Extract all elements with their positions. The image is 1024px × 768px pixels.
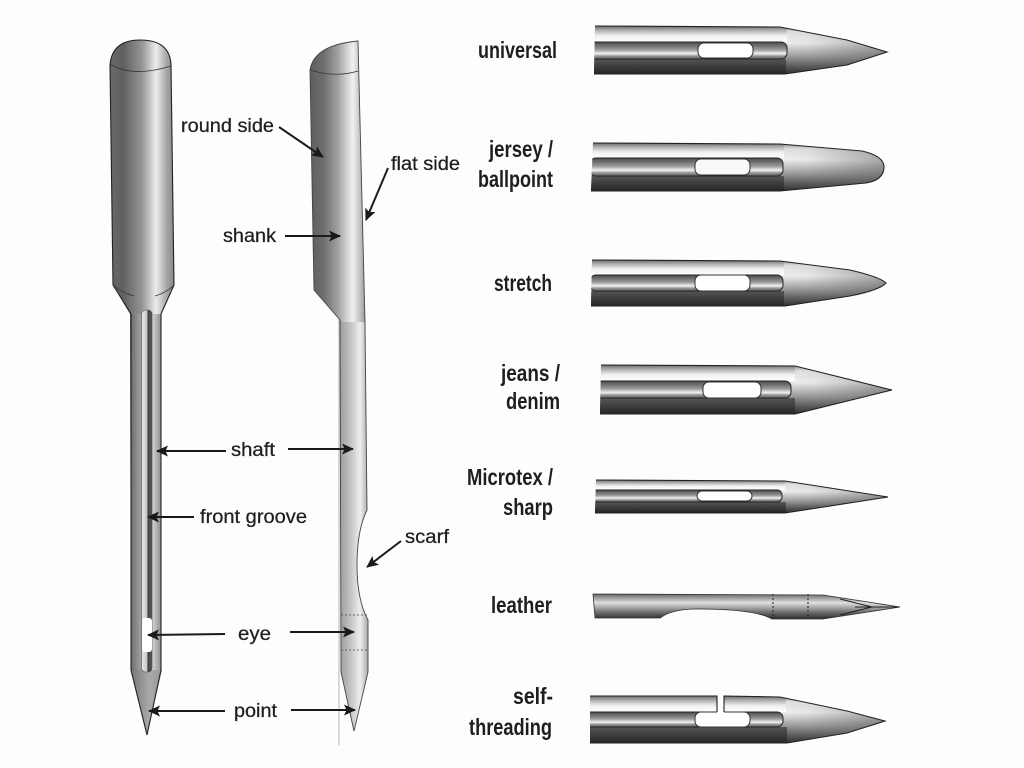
needle type: jersey / ballpoint bbox=[478, 136, 890, 192]
needle: stretch bbox=[590, 260, 890, 306]
arrow: shank bbox=[285, 235, 340, 237]
label: leather: leather bbox=[491, 592, 552, 618]
shoulder lines bbox=[113, 285, 174, 296]
label: point: point bbox=[234, 701, 278, 722]
label: universal: universal bbox=[478, 37, 557, 63]
label: jersey / ballpoint bbox=[478, 136, 553, 192]
eye dashes bbox=[341, 615, 367, 650]
front groove bbox=[142, 310, 152, 672]
arrow: eye left bbox=[148, 634, 225, 635]
label: flat side: flat side bbox=[391, 154, 460, 175]
label: eye: eye bbox=[238, 624, 271, 645]
label: Microtex / sharp bbox=[467, 464, 553, 520]
arrow: round side bbox=[279, 127, 323, 157]
needle: Microtex / sharp bbox=[590, 480, 890, 513]
anatomy labels bbox=[148, 116, 460, 722]
needle: universal bbox=[590, 26, 890, 74]
centre line bbox=[338, 300, 340, 745]
label: jeans / denim: denim bbox=[506, 388, 560, 414]
arrow: front groove bbox=[148, 516, 194, 518]
front needle outline bbox=[110, 40, 174, 735]
shank cap line bbox=[110, 64, 171, 72]
needle type: universal bbox=[478, 26, 890, 74]
needle type: Microtex / sharp bbox=[467, 464, 890, 520]
label: jeans / denim: jeans / bbox=[500, 360, 560, 386]
needle type: stretch bbox=[494, 260, 890, 306]
needle type: jeans / denim bbox=[500, 360, 895, 414]
arrow: eye right bbox=[290, 631, 354, 633]
side needle shaft bbox=[340, 318, 368, 731]
side needle shank bbox=[310, 41, 365, 322]
shank cap line bbox=[310, 70, 358, 74]
label: self-threading bbox=[469, 683, 553, 740]
arrow: point right bbox=[291, 709, 355, 711]
front needle shaft bbox=[130, 310, 161, 670]
label: self-threading: threading bbox=[469, 714, 552, 740]
label: shank: shank bbox=[223, 226, 277, 247]
label: Microtex / sharp: Microtex / bbox=[467, 464, 553, 490]
side needle outline bbox=[310, 41, 368, 731]
label: Microtex / sharp: sharp bbox=[503, 494, 553, 520]
label: jersey / ballpoint: jersey / bbox=[488, 136, 553, 162]
label: jersey / ballpoint: ballpoint bbox=[478, 166, 553, 192]
label: jeans / denim bbox=[500, 360, 560, 414]
front needle point bbox=[131, 670, 162, 735]
arrow: point left bbox=[149, 710, 225, 712]
label: scarf: scarf bbox=[405, 527, 450, 548]
label: round side: round side bbox=[181, 116, 274, 137]
front needle shank bbox=[110, 40, 174, 314]
front needle bbox=[110, 40, 174, 735]
needle: jersey / ballpoint bbox=[590, 143, 890, 191]
label: shaft: shaft bbox=[231, 440, 276, 461]
needle: jeans / denim bbox=[595, 365, 895, 414]
arrow: flat side bbox=[366, 168, 388, 220]
needle type: self-threading bbox=[469, 683, 890, 743]
needle: leather bbox=[593, 594, 900, 619]
label: self-threading: self- bbox=[513, 683, 553, 709]
label: front groove: front groove bbox=[200, 507, 307, 528]
arrow: shaft left bbox=[157, 450, 226, 452]
arrow: scarf bbox=[367, 541, 401, 567]
label: stretch: stretch bbox=[494, 270, 552, 296]
needle: self-threading bbox=[585, 696, 890, 743]
arrow: shaft right bbox=[288, 448, 353, 450]
side needle bbox=[310, 41, 368, 745]
eye opening bbox=[142, 618, 152, 652]
needle type: leather bbox=[491, 592, 900, 619]
